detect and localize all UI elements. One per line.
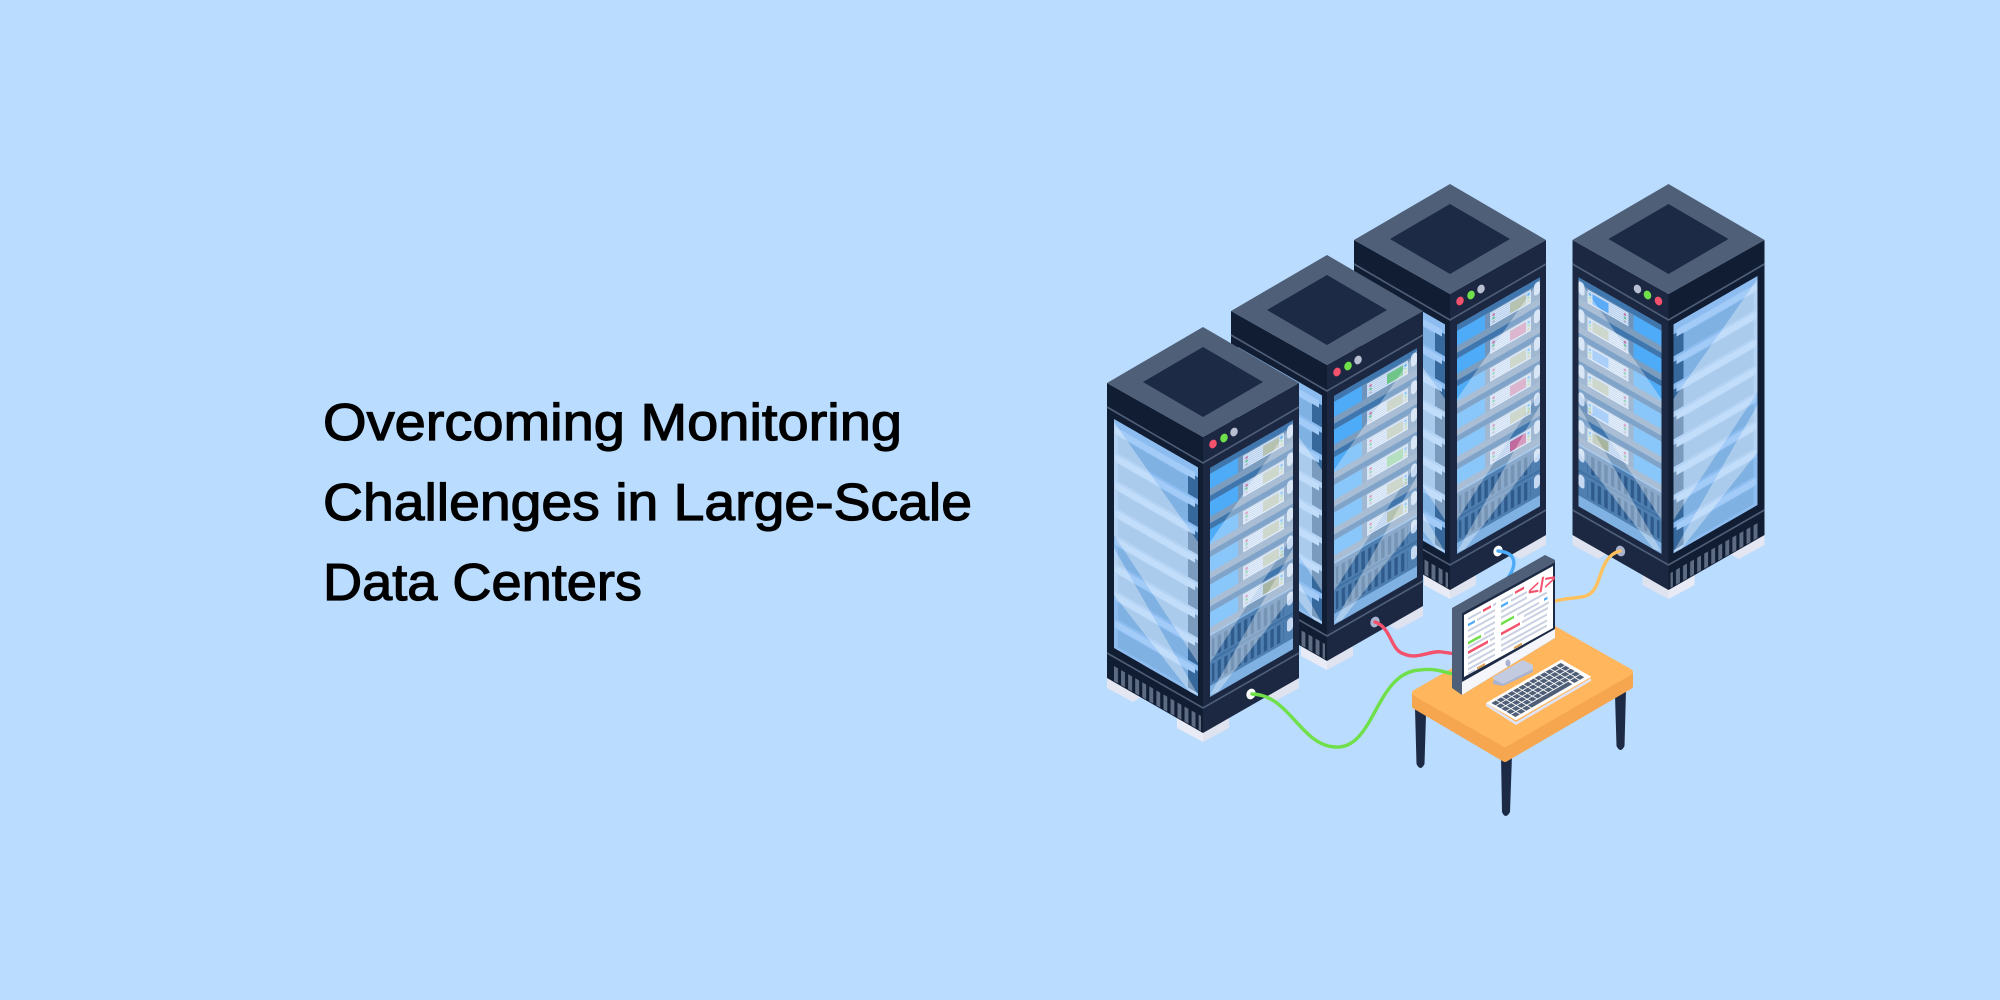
desk side faces — [1415, 673, 1630, 759]
cable: green — [1252, 669, 1456, 747]
server rack 2 — [1231, 255, 1423, 670]
keyboard bottom row — [1511, 675, 1584, 717]
server rack 3 — [1354, 184, 1546, 599]
server rack 1 — [1107, 327, 1299, 742]
desk — [1415, 621, 1630, 816]
title: Data Centers — [323, 554, 642, 612]
cable: red — [1375, 622, 1456, 656]
cable: blue — [1498, 551, 1514, 578]
desk top — [1415, 621, 1630, 744]
title — [323, 394, 972, 612]
title: Overcoming Monitoring — [323, 394, 902, 452]
screen highlighted lines — [1468, 574, 1548, 675]
title: Challenges in Large-Scale — [323, 474, 972, 532]
code symbol: </> — [1528, 568, 1556, 603]
desk legs — [1415, 690, 1626, 816]
keyboard — [1486, 660, 1591, 725]
keyboard keys — [1491, 662, 1581, 714]
monitor stand — [1493, 660, 1533, 686]
monitor — [1452, 555, 1556, 695]
screen code lines — [1468, 573, 1549, 675]
cable: yellow — [1552, 551, 1620, 602]
server rack 4 (mirrored) — [1572, 184, 1764, 599]
